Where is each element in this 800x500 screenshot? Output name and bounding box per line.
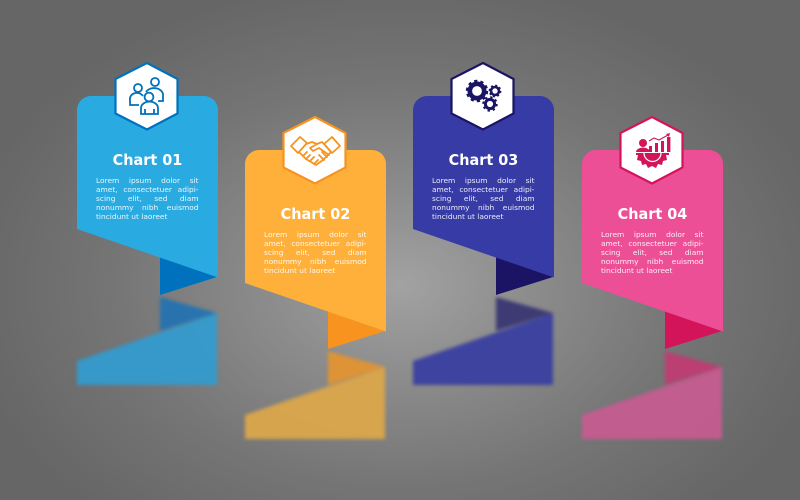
heading: chart 03: Chart 03: [449, 151, 518, 169]
text block: chart 03: amet, consectetuer adipi-: [432, 184, 534, 194]
text block: chart 02: [264, 230, 366, 274]
text block: chart 02: scing elit, sed diam: [264, 248, 366, 256]
text block: chart 01: tincidunt ut laoreet: [96, 212, 167, 220]
text block: chart 03: tincidunt ut laoreet: [432, 212, 503, 220]
text block: chart 02: Lorem ipsum dolor sit: [264, 230, 366, 238]
text block: chart 01: nonummy nibh euismod: [96, 202, 198, 212]
card shape: chart 02: [245, 116, 386, 349]
text block: chart 04: tincidunt ut laoreet: [601, 266, 672, 274]
heading: chart 02: Chart 02: [281, 205, 350, 223]
text block: chart 03: Lorem ipsum dolor sit: [432, 176, 534, 184]
panel: chart 01: [77, 62, 218, 295]
text block: chart 01: [96, 176, 198, 220]
text block: chart 03: nonummy nibh euismod: [432, 202, 534, 212]
heading: chart 01: Chart 01: [113, 151, 182, 169]
card shape: chart 01: [77, 62, 218, 295]
card shape: chart 03: [413, 62, 554, 295]
text block: chart 04: nonummy nibh euismod: [601, 256, 704, 266]
card shape: chart 04: [582, 116, 723, 349]
text block: chart 04: scing elit, sed diam: [601, 248, 704, 256]
text block: chart 03: [432, 176, 534, 220]
panel: chart 04: [582, 116, 723, 349]
heading: chart 04: Chart 04: [618, 205, 687, 223]
text block: chart 01: scing elit, sed diam: [96, 194, 198, 202]
text block: chart 01: Lorem ipsum dolor sit: [96, 176, 198, 184]
reflection: chart 04: [580, 350, 724, 441]
reflection: chart 01: [74, 296, 219, 388]
text block: chart 02: amet, consectetuer adipi-: [264, 238, 366, 248]
text block: chart 04: [601, 230, 704, 274]
text block: chart 02: tincidunt ut laoreet: [264, 266, 335, 274]
text block: chart 04: Lorem ipsum dolor sit: [601, 230, 704, 238]
text block: chart 04: amet, consectetuer adipi-: [601, 238, 704, 248]
text block: chart 02: nonummy nibh euismod: [264, 256, 366, 266]
reflection: chart 02: [242, 350, 387, 442]
text block: chart 01: amet, consectetuer adipi-: [96, 184, 198, 194]
panel: chart 02: [245, 116, 386, 349]
text block: chart 03: scing elit, sed diam: [432, 194, 534, 202]
reflection: chart 03: [411, 296, 555, 387]
panel: chart 03: [413, 62, 554, 295]
